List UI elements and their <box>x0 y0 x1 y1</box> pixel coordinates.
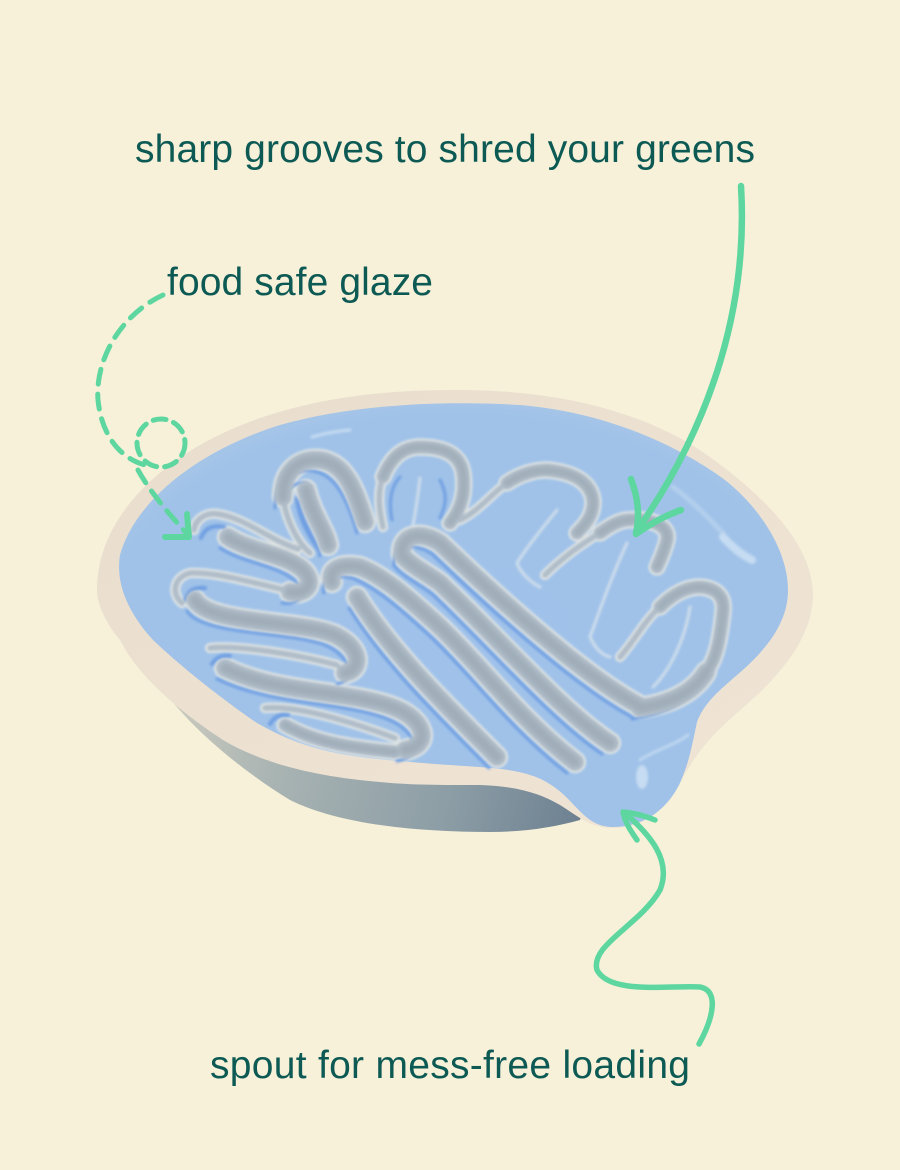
glaze highlights <box>312 430 752 789</box>
arrow: sharp grooves <box>631 186 742 534</box>
blue glaze bowl <box>119 403 788 827</box>
label: sharp grooves: sharp grooves to shred your greens <box>135 128 755 171</box>
arrow: food safe glaze <box>98 295 189 537</box>
dish rim <box>97 390 813 828</box>
arrow: spout <box>596 812 712 1044</box>
label: spout: spout for mess-free loading <box>210 1044 690 1087</box>
dish underside <box>160 685 590 832</box>
label: food safe glaze: food safe glaze <box>167 261 433 304</box>
groove channels <box>175 447 723 762</box>
grooves <box>175 447 723 773</box>
groove halo <box>175 447 723 762</box>
glaze pool lines <box>185 471 698 773</box>
ceramic grater dish <box>97 390 813 832</box>
raised tongues <box>413 478 690 687</box>
groove shading <box>195 447 723 762</box>
